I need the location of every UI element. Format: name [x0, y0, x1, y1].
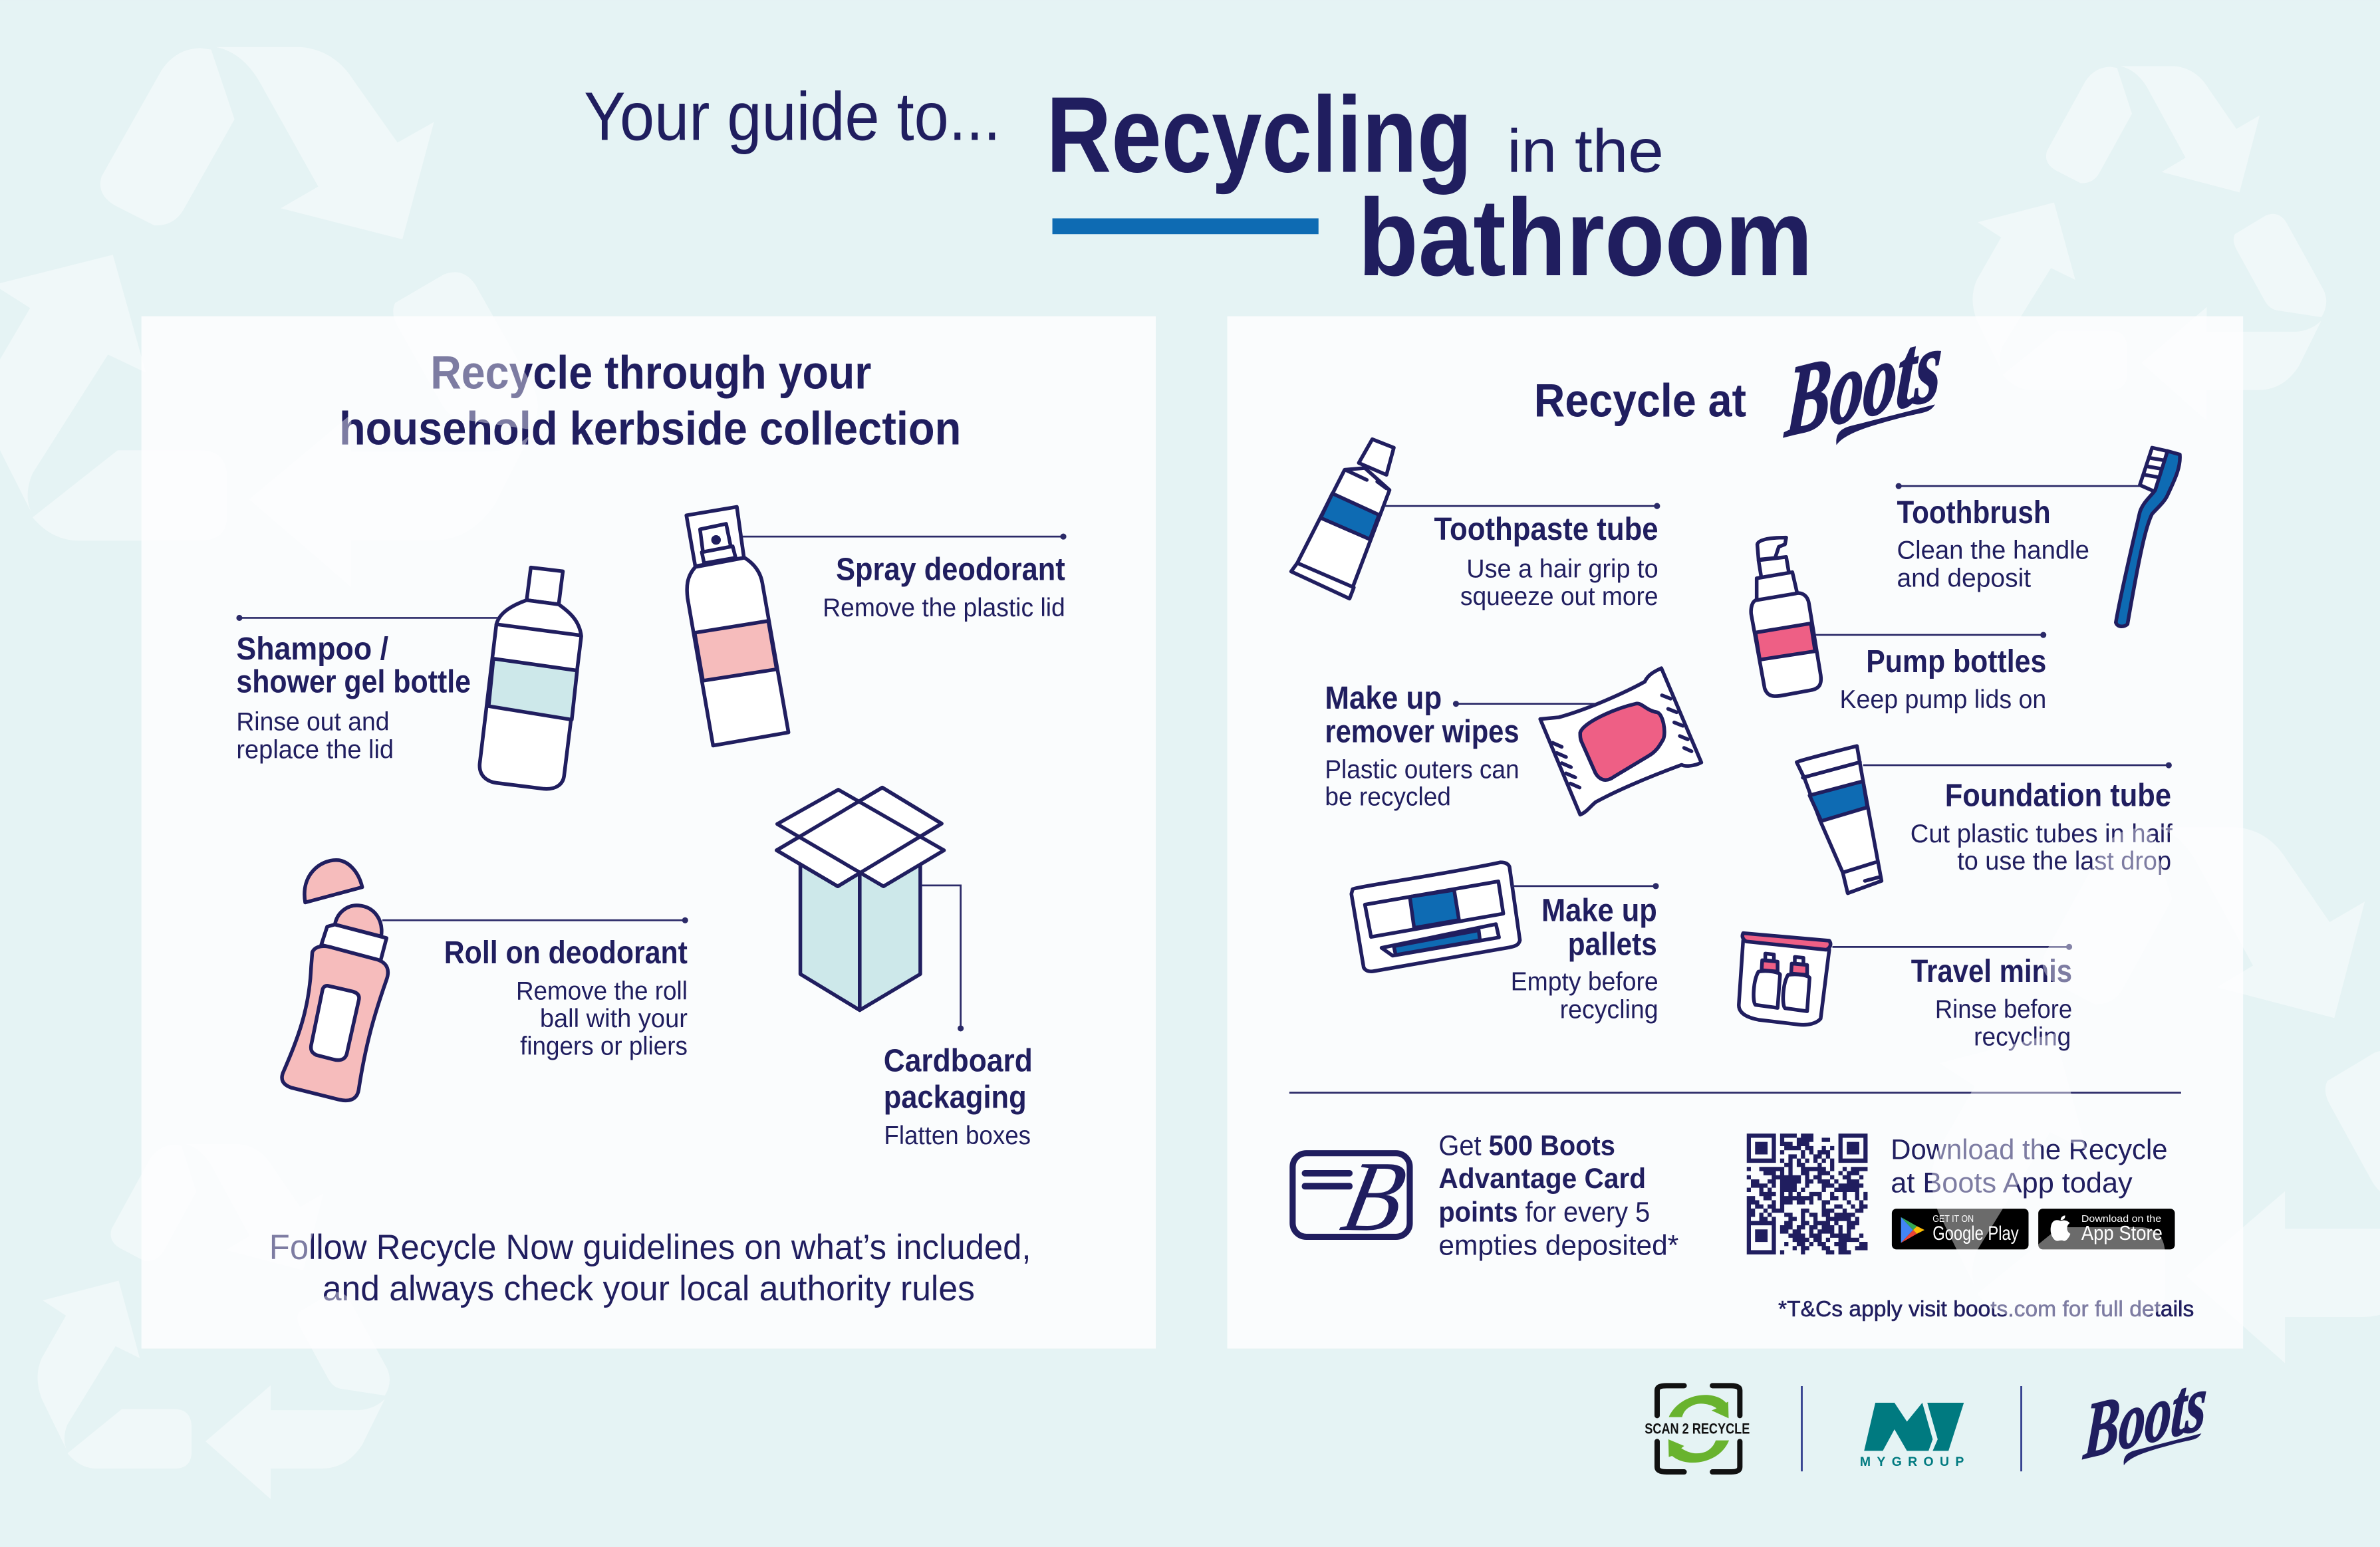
callout: pump bottles: Pump bottles: [1866, 644, 2046, 679]
panel heading: Recycle through your: [430, 346, 871, 399]
text: download the app: Download the Recycle: [1891, 1133, 2168, 1165]
title: bathroom: [1358, 176, 1813, 298]
callout: foundation tube: Foundation tube: [1945, 778, 2171, 814]
callout: toothbrush: Toothbrush: [1897, 495, 2051, 531]
callout: shampoo bottle: Shampoo /: [236, 632, 388, 667]
callout: foundation tube: [1863, 762, 2173, 876]
callout: roll on deodorant: fingers or pliers: [520, 1032, 688, 1060]
callout: cardboard packaging: Flatten boxes: [884, 1122, 1031, 1150]
callout: shampoo bottle: shower gel bottle: [236, 665, 471, 700]
text: advantage card points: empties deposited*: [1438, 1230, 1678, 1261]
footnote: recycle now guidelines: Follow Recycle Now guidelines on what’s included,: [269, 1228, 1031, 1267]
badge: App Store: [2038, 1209, 2175, 1249]
logo: MY Group: [1860, 1403, 1964, 1469]
title: [584, 74, 1813, 298]
callout: spray deodorant: [743, 534, 1067, 622]
callout: spray deodorant: Spray deodorant: [836, 552, 1065, 588]
callout: make up remover wipes: [1325, 681, 1595, 812]
logo: Boots footer: [2081, 1357, 2210, 1477]
logo: Boots: Boots: [1782, 307, 1946, 459]
callout: make up remover wipes: remover wipes: [1325, 714, 1520, 749]
text: advantage card points: points for every 5: [1438, 1197, 1650, 1228]
callout: cardboard packaging: [884, 886, 1033, 1150]
callout: toothpaste tube: Toothpaste tube: [1434, 512, 1658, 547]
callout: foundation tube: Cut plastic tubes in half: [1911, 820, 2173, 848]
badge: Google Play: GET IT ON: [1932, 1214, 1974, 1225]
text: advantage card points: Get 500 Boots: [1438, 1130, 1615, 1161]
text: download the app: at Boots App today: [1891, 1167, 2133, 1198]
badge: App Store: App Store: [2081, 1221, 2163, 1245]
callout: spray deodorant: Remove the plastic lid: [823, 594, 1065, 622]
callout: make up remover wipes: Make up: [1325, 681, 1442, 716]
badge: Google Play: [1892, 1209, 2028, 1249]
icon: make up pallet: [1351, 862, 1520, 971]
logo: Boots footer: Boots: [2081, 1357, 2210, 1477]
background recycling symbol: top right: [1972, 66, 2326, 421]
background recycling symbol: bottom left: [37, 1144, 390, 1499]
icon: cardboard box: [777, 788, 944, 1010]
badge: App Store: Download on the: [2081, 1214, 2161, 1225]
callout: roll on deodorant: [382, 917, 688, 1060]
callout: cardboard packaging: Cardboard: [884, 1043, 1033, 1078]
logo: Scan 2 Recycle: [1657, 1385, 1740, 1472]
callout: travel minis: Travel minis: [1911, 954, 2072, 989]
panel: household kerbside collection: [142, 316, 1156, 1349]
callout: toothpaste tube: [1385, 503, 1660, 611]
callout: toothbrush: and deposit: [1897, 564, 2031, 593]
callout: make up pallets: Empty before: [1511, 967, 1658, 996]
panel heading: household kerbside collection: [339, 403, 961, 455]
title: Recycling: [1046, 74, 1472, 195]
title: in the: [1507, 117, 1664, 185]
footnote: recycle now guidelines: and always check your local authority rules: [323, 1269, 975, 1308]
callout: make up pallets: Make up: [1541, 893, 1657, 929]
badge: Google Play: Google Play: [1932, 1223, 2019, 1245]
callout: toothbrush: [1896, 483, 2140, 593]
icon: advantage card: [1293, 1141, 1415, 1252]
callout: toothpaste tube: Use a hair grip to: [1466, 554, 1658, 583]
callout: roll on deodorant: ball with your: [540, 1005, 688, 1033]
text: advantage card points: Advantage Card: [1438, 1163, 1646, 1194]
label: scan 2 recycle: SCAN 2 RECYCLE: [1645, 1421, 1750, 1437]
callout: shampoo bottle: replace the lid: [236, 736, 394, 765]
terms and conditions note: *T&Cs apply visit boots.com for full details: [1778, 1297, 2194, 1322]
callout: foundation tube: to use the last drop: [1957, 847, 2171, 876]
icon: advantage card: B: [1333, 1141, 1415, 1252]
callout: toothpaste tube: squeeze out more: [1460, 582, 1658, 611]
background recycling symbol: top left: [0, 47, 538, 587]
text: advantage card points: [1438, 1130, 1678, 1261]
background recycling symbol: bottom right: [1932, 827, 2380, 1363]
icon: spray deodorant: [686, 507, 789, 745]
callout: shampoo bottle: Rinse out and: [236, 707, 389, 736]
footnote: recycle now guidelines: [269, 1228, 1031, 1308]
logo: Boots: [1782, 307, 1946, 459]
callout: roll on deodorant: Roll on deodorant: [444, 935, 688, 971]
icon: make up remover wipes: [1540, 668, 1701, 814]
title: Your guide to...: [584, 78, 1001, 154]
QR code: [1747, 1135, 1867, 1252]
panel heading: Recycle at: [1534, 374, 1746, 427]
panel: recycle at Boots: [1228, 307, 2243, 1349]
callout: toothbrush: Clean the handle: [1897, 536, 2089, 565]
icon: roll on deodorant: [282, 860, 388, 1100]
callout: pump bottles: Keep pump lids on: [1839, 685, 2046, 714]
icon: shampoo bottle: [479, 568, 581, 789]
callout: make up pallets: recycling: [1560, 996, 1658, 1024]
callout: pump bottles: [1815, 632, 2046, 714]
callout: cardboard packaging: packaging: [884, 1080, 1027, 1115]
panel heading: [339, 346, 961, 455]
callout: travel minis: Rinse before: [1935, 995, 2072, 1024]
callout: travel minis: recycling: [1974, 1022, 2071, 1051]
icon: travel minis bag: [1739, 933, 1831, 1025]
callout: shampoo bottle: [236, 615, 498, 765]
callout: roll on deodorant: Remove the roll: [516, 977, 688, 1006]
icon: toothbrush: [2116, 447, 2180, 626]
text: download the app: [1891, 1133, 2168, 1198]
icon: toothpaste tube: [1291, 439, 1394, 598]
callout: make up pallets: [1511, 883, 1659, 1024]
icon: foundation tube: [1797, 746, 1881, 893]
icon: pump bottle: [1751, 538, 1821, 696]
callout: make up remover wipes: Plastic outers can: [1325, 755, 1520, 784]
callout: make up remover wipes: be recycled: [1325, 783, 1451, 812]
callout: travel minis: [1832, 944, 2072, 1051]
callout: make up pallets: pallets: [1568, 927, 1657, 962]
logo: MY Group: MYGROUP: [1860, 1455, 1964, 1469]
